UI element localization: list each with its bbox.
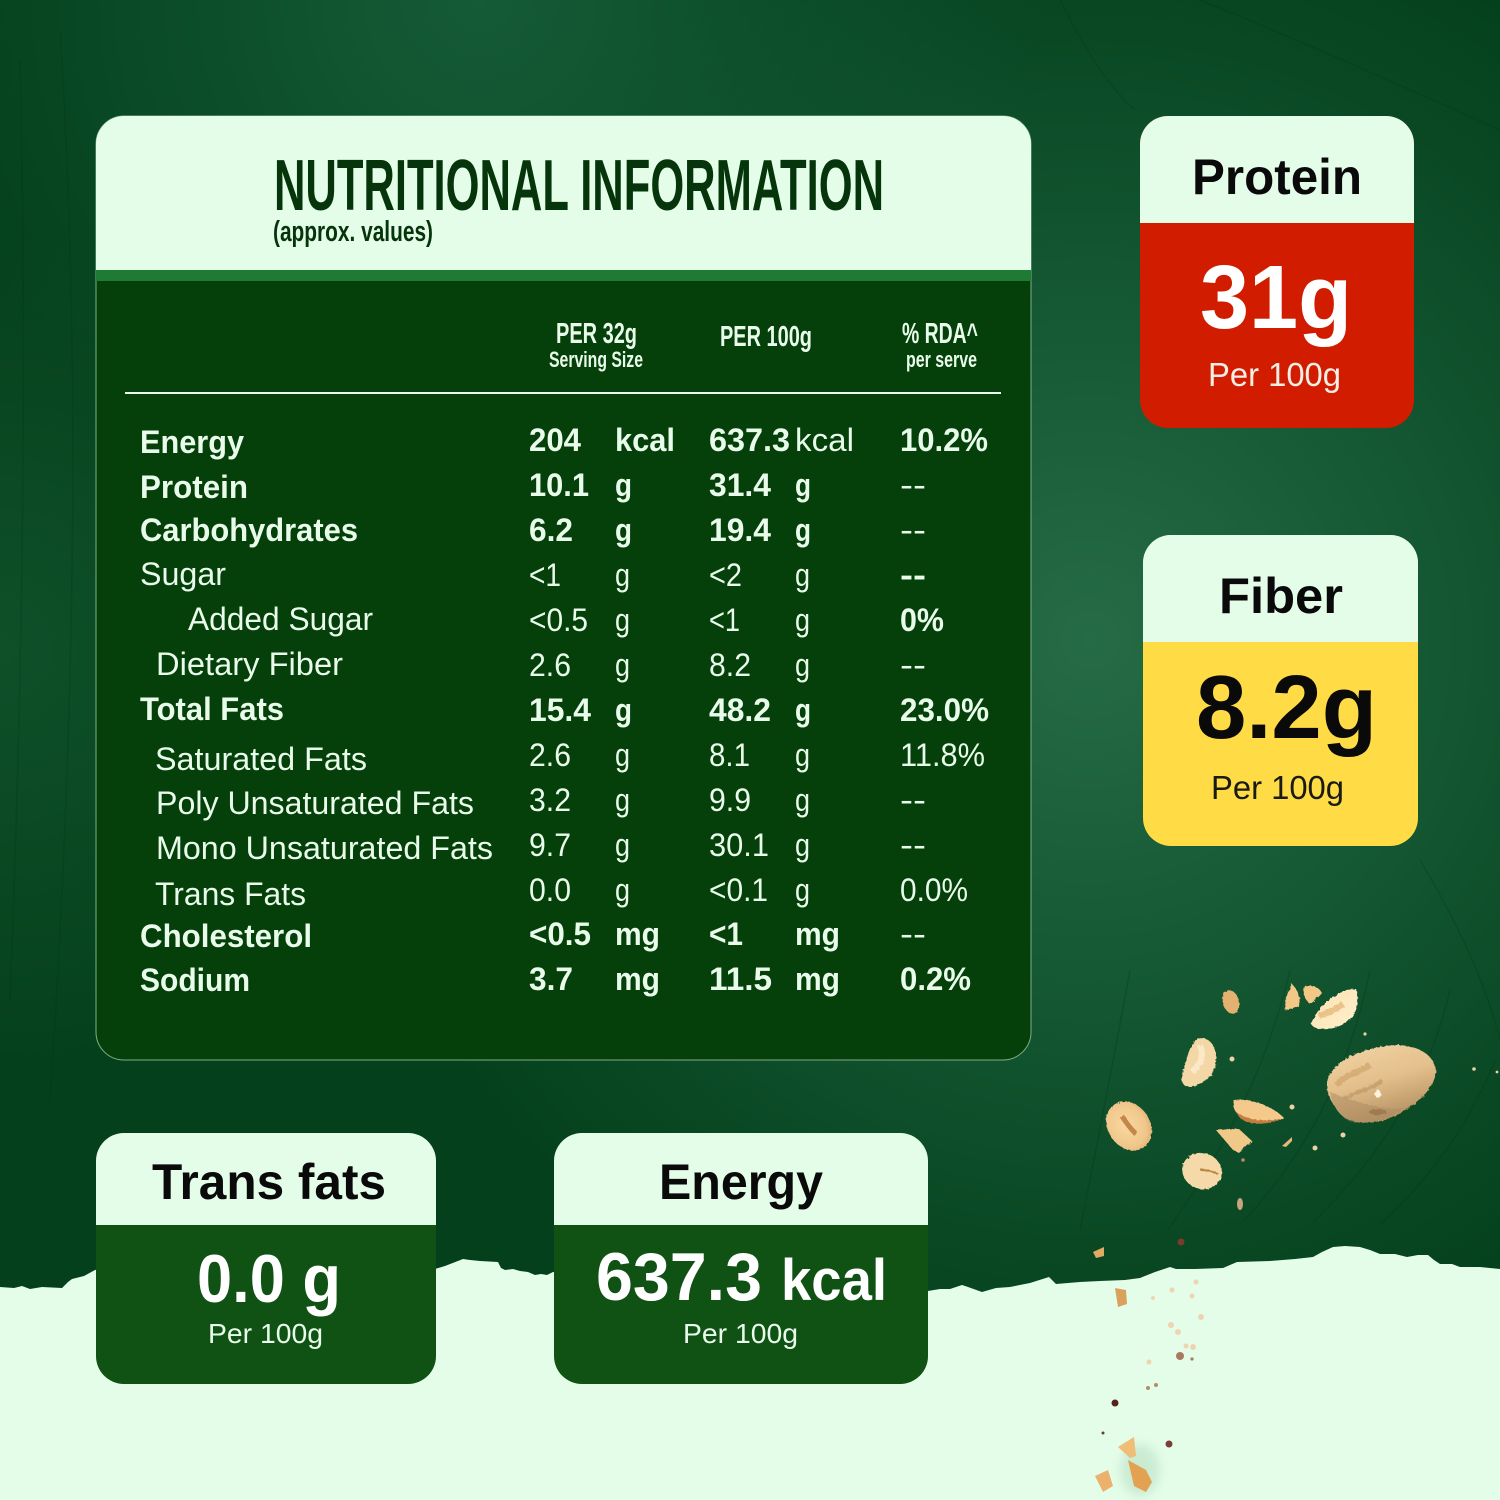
row: protein: g (795, 467, 811, 503)
row: dietary fiber: -- (900, 647, 926, 683)
row: saturated fats: g (795, 737, 810, 773)
row: trans fats: <0.1 (709, 872, 768, 908)
row: dietary fiber: g (615, 647, 630, 683)
row: sugar: Sugar (140, 556, 226, 592)
card: trans fats (96, 1133, 436, 1384)
card: energy: 637.3 (596, 1239, 762, 1315)
row: cholesterol: Cholesterol (140, 918, 312, 954)
row: added sugar: <1 (709, 602, 740, 638)
row: carbohydrates: Carbohydrates (140, 512, 358, 548)
row: saturated fats (155, 737, 985, 777)
card: energy: Per 100g (683, 1318, 798, 1349)
column header: per 32g: PER 32g (556, 318, 637, 350)
card: fiber (1143, 535, 1418, 846)
column header: per 32g (549, 318, 643, 372)
icon: peanut shell (1327, 1045, 1436, 1123)
row: added sugar: g (795, 602, 810, 638)
row: sodium: mg (615, 961, 660, 997)
row: energy: Energy (140, 424, 244, 460)
row: energy: kcal (795, 422, 854, 458)
row: sodium: Sodium (140, 962, 250, 998)
row: dietary fiber: Dietary Fiber (156, 646, 343, 682)
card: protein (1140, 116, 1414, 428)
column header: rda: % RDA^ (902, 318, 978, 350)
row: sodium: mg (795, 961, 840, 997)
row: total fats: 15.4 (529, 692, 591, 728)
row: saturated fats: 11.8% (900, 737, 985, 773)
row: energy: 10.2% (900, 422, 988, 458)
row: sugar (140, 556, 926, 593)
row: trans fats: Trans Fats (155, 876, 306, 912)
card: fiber: 8.2g (1196, 658, 1377, 758)
row: carbohydrates: 19.4 (709, 512, 771, 548)
row: added sugar: g (615, 602, 630, 638)
row: sodium (140, 961, 971, 998)
card: fiber: Per 100g (1211, 769, 1344, 806)
row: protein: 31.4 (709, 467, 771, 503)
row: trans fats: 0.0% (900, 872, 968, 908)
row: trans fats: 0.0 (529, 872, 571, 908)
icon: peanut halves (1097, 984, 1358, 1195)
card: protein: 31g (1200, 248, 1352, 348)
row: mono unsaturated fats: 30.1 (709, 827, 769, 863)
row: mono unsaturated fats: g (795, 827, 810, 863)
row: sodium: 3.7 (529, 961, 573, 997)
row: poly unsaturated fats: g (795, 782, 810, 818)
column header: rda: per serve (906, 347, 977, 372)
row: added sugar (188, 601, 944, 638)
row: saturated fats: 2.6 (529, 737, 571, 773)
card: trans fats: Trans fats (152, 1154, 386, 1210)
row: sugar: g (795, 557, 810, 593)
row: protein: Protein (140, 469, 248, 505)
row: dietary fiber: 2.6 (529, 647, 571, 683)
row: poly unsaturated fats: g (615, 782, 630, 818)
torn paper strip (0, 1246, 1500, 1500)
row: dietary fiber: g (795, 647, 810, 683)
row: energy: kcal (615, 422, 675, 458)
row: added sugar: <0.5 (529, 602, 588, 638)
row: protein (140, 467, 926, 505)
row: poly unsaturated fats (156, 782, 926, 821)
card: energy (554, 1133, 928, 1384)
icon: crumbs on paper (1095, 1280, 1204, 1496)
row: total fats: Total Fats (140, 691, 284, 727)
column header: rda (902, 318, 978, 372)
row: total fats: 48.2 (709, 692, 771, 728)
row: mono unsaturated fats: g (615, 827, 630, 863)
row: poly unsaturated fats: Poly Unsaturated Fats (156, 785, 474, 821)
row: saturated fats: Saturated Fats (155, 741, 367, 777)
row: energy: 637.3 (709, 422, 790, 458)
card: energy: kcal (781, 1248, 887, 1313)
row: carbohydrates: g (795, 512, 811, 548)
row: sodium: 0.2% (900, 961, 971, 997)
row: total fats: g (615, 692, 632, 728)
row: protein: g (615, 467, 632, 503)
card: trans fats: 0.0 g (197, 1241, 341, 1317)
row: sugar: <1 (529, 557, 561, 593)
row: sodium: 11.5 (709, 961, 772, 997)
row: protein: 10.1 (529, 467, 589, 503)
card: protein: Protein (1192, 149, 1362, 205)
card: trans fats: Per 100g (208, 1318, 323, 1349)
row: mono unsaturated fats: 9.7 (529, 827, 571, 863)
row: cholesterol: <0.5 (529, 916, 591, 952)
row: trans fats: g (795, 872, 810, 908)
panel body (96, 116, 1031, 1060)
row: saturated fats: g (615, 737, 630, 773)
row: sugar: <2 (709, 557, 742, 593)
panel header (96, 116, 1031, 270)
row: cholesterol (140, 916, 926, 954)
panel: nutritional information (96, 116, 1031, 1060)
column header: per 32g: Serving Size (549, 347, 643, 372)
row: carbohydrates: -- (900, 512, 926, 548)
row: carbohydrates (140, 512, 926, 548)
card: energy: Energy (659, 1154, 823, 1210)
card: fiber: Fiber (1219, 568, 1343, 624)
peanuts illustration (1093, 984, 1498, 1496)
row: total fats: g (795, 692, 811, 728)
row: poly unsaturated fats: 9.9 (709, 782, 751, 818)
row: poly unsaturated fats: 3.2 (529, 782, 571, 818)
row: sugar: g (615, 557, 630, 593)
row: sugar: -- (900, 557, 926, 593)
row: carbohydrates: g (615, 512, 632, 548)
title: NUTRITIONAL INFORMATION (274, 146, 884, 226)
icon: crumbs on green (1093, 1032, 1498, 1258)
row: dietary fiber (156, 646, 926, 683)
row: mono unsaturated fats (156, 827, 926, 866)
row: mono unsaturated fats: -- (900, 827, 926, 863)
row: trans fats (155, 872, 968, 912)
row: dietary fiber: 8.2 (709, 647, 751, 683)
row: total fats (140, 691, 989, 728)
row: poly unsaturated fats: -- (900, 782, 926, 818)
card: protein: Per 100g (1208, 356, 1341, 393)
row: added sugar: 0% (900, 602, 944, 638)
row: total fats: 23.0% (900, 692, 989, 728)
row: energy (140, 422, 988, 460)
row: carbohydrates: 6.2 (529, 512, 573, 548)
row: added sugar: Added Sugar (188, 601, 373, 637)
subtitle: (approx. values) (273, 216, 433, 248)
row: cholesterol: mg (615, 916, 660, 952)
row: cholesterol: -- (900, 916, 926, 952)
row: cholesterol: mg (795, 916, 840, 952)
column header: per 100g: PER 100g (720, 321, 812, 353)
row: cholesterol: <1 (709, 916, 743, 952)
row: energy: 204 (529, 422, 581, 458)
row: mono unsaturated fats: Mono Unsaturated Fats (156, 830, 493, 866)
row: protein: -- (900, 467, 926, 503)
row: trans fats: g (615, 872, 630, 908)
row: saturated fats: 8.1 (709, 737, 750, 773)
